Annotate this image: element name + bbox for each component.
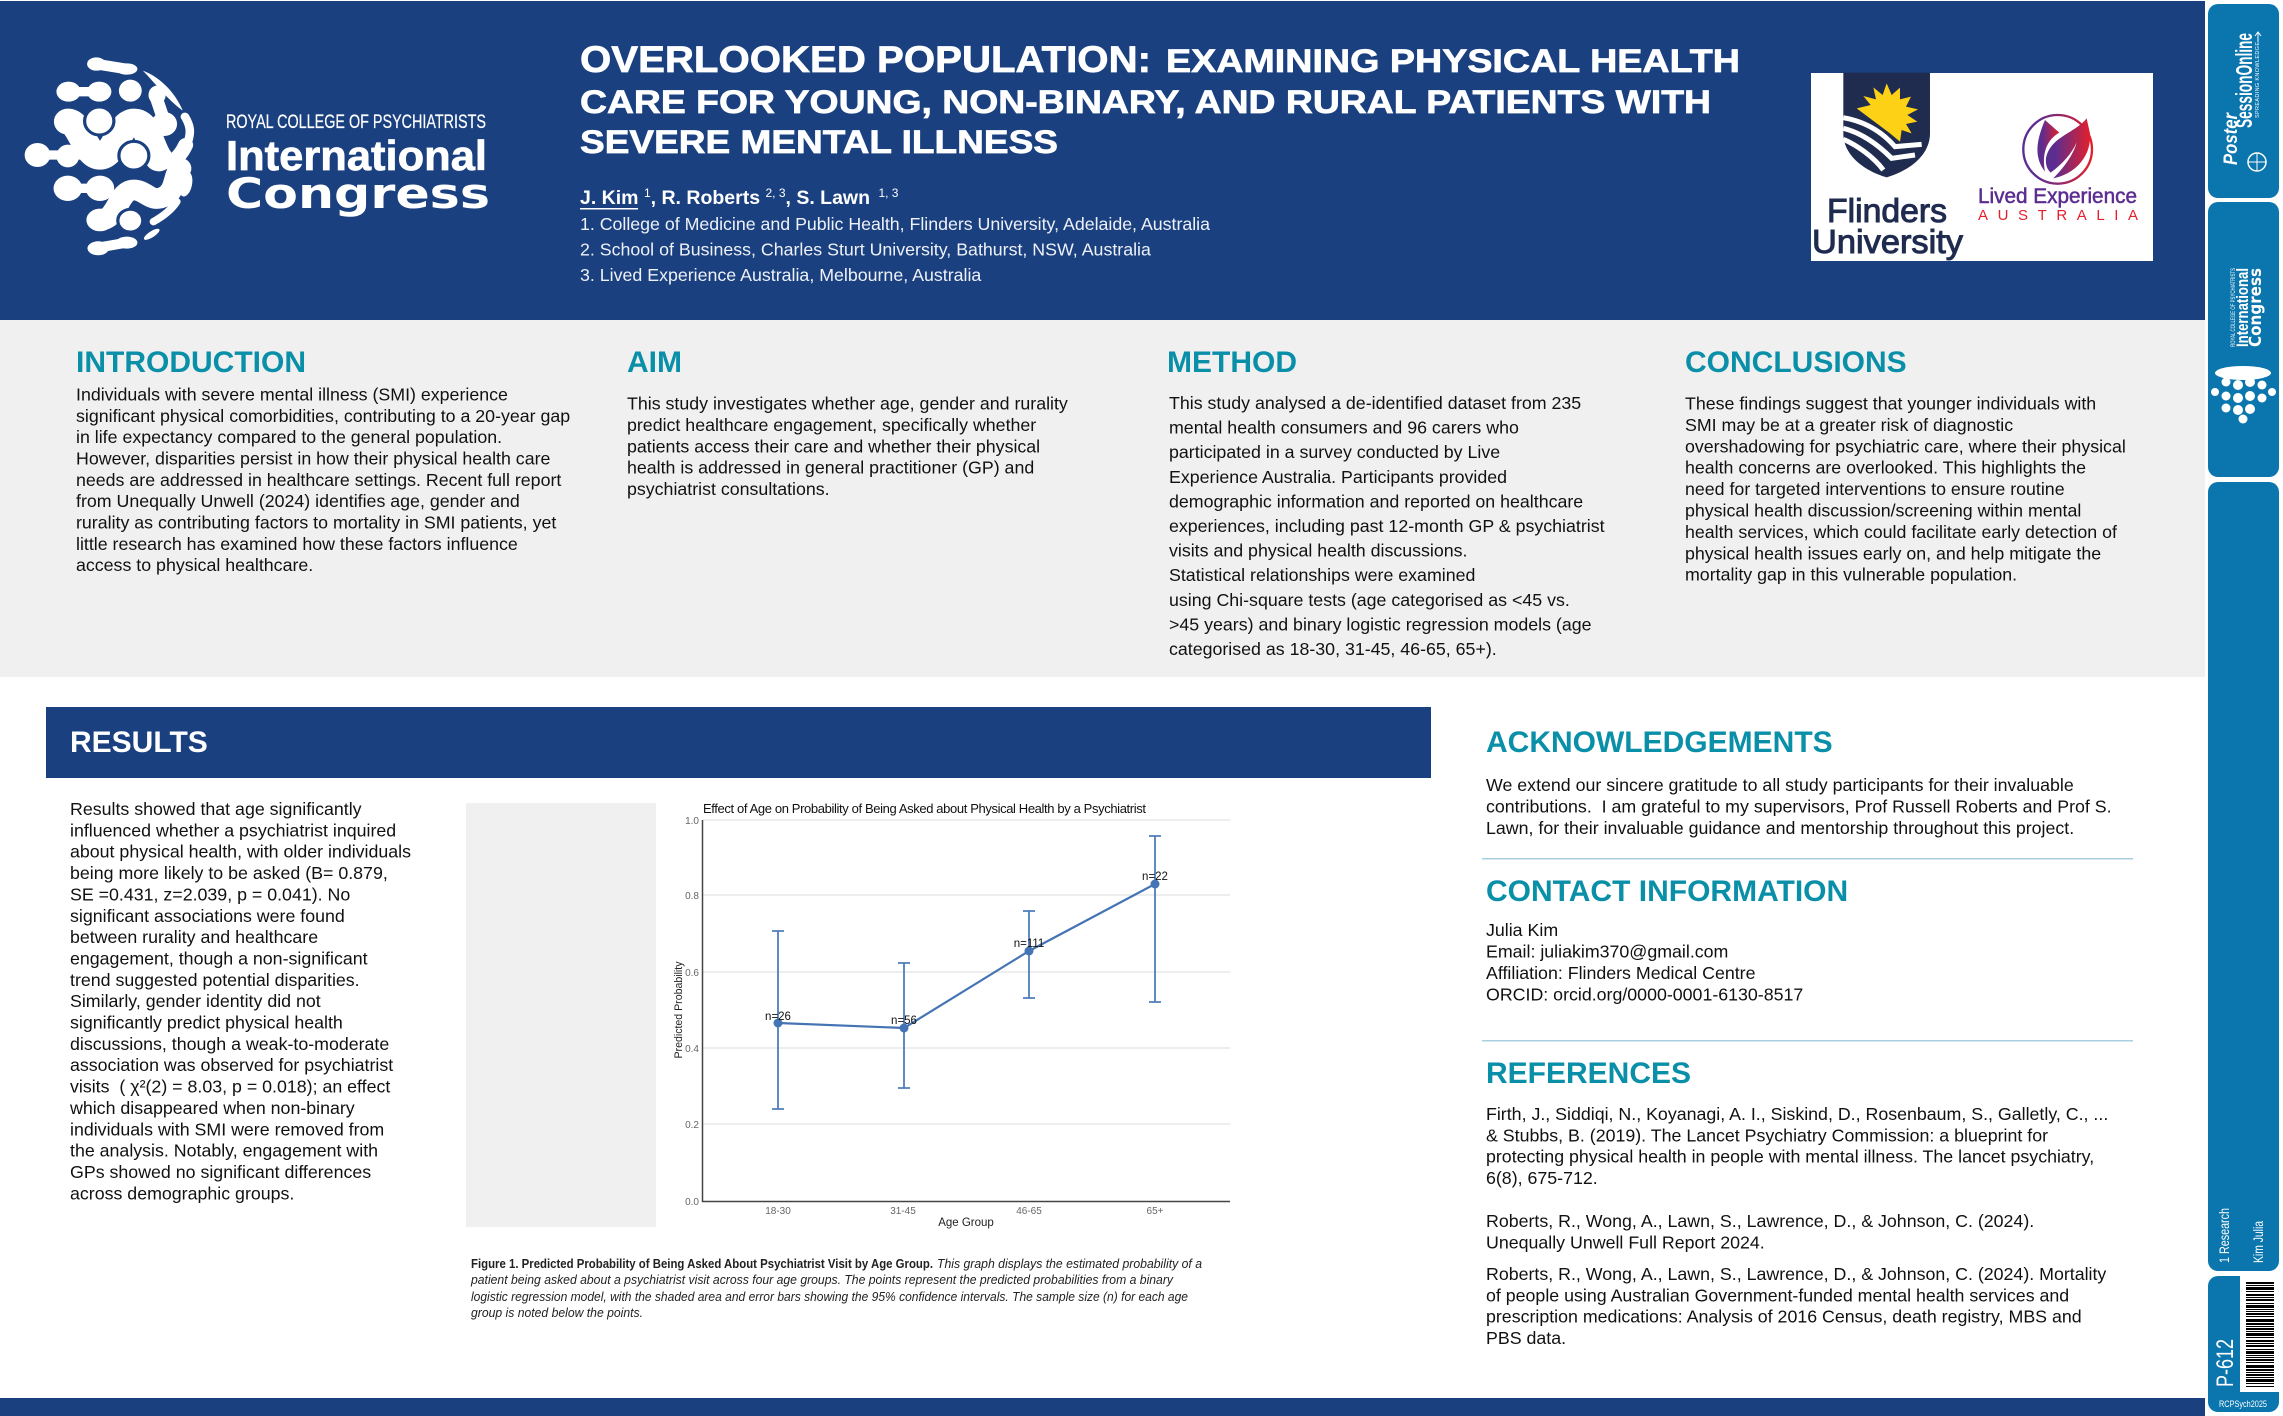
panel: conclusions bbox=[1685, 346, 2126, 585]
panel: conclusions: need for targeted interventions to ensure routine bbox=[1685, 479, 2065, 499]
panel: conclusions: CONCLUSIONS bbox=[1685, 346, 1907, 379]
authors bbox=[580, 186, 899, 210]
panel: acknowledgements: Lawn, for their invaluable guidance and mentorship throughout this project. bbox=[1486, 818, 2074, 838]
icon: congress dome bbox=[2211, 366, 2276, 424]
panel: references bbox=[1486, 1057, 2108, 1348]
trend line and points bbox=[778, 884, 1155, 1028]
panel: method: Statistical relationships were examined bbox=[1169, 565, 1475, 585]
results text: discussions, though a weak-to-moderate bbox=[70, 1034, 389, 1054]
panel: introduction: in life expectancy compared to the general population. bbox=[76, 427, 502, 447]
figure caption: group is noted below the points. bbox=[471, 1305, 643, 1320]
sidebar: International Congress: Congress bbox=[2246, 268, 2266, 347]
affiliations bbox=[580, 214, 1210, 285]
authors: , R. Roberts bbox=[651, 187, 765, 209]
results text: across demographic groups. bbox=[70, 1183, 294, 1203]
panel: aim: patients access their care and whether their physical bbox=[627, 436, 1040, 456]
logo text: International bbox=[226, 132, 487, 179]
results text: Similarly, gender identity did not bbox=[70, 991, 321, 1011]
panel: conclusions: physical health issues early on, and help mitigate the bbox=[1685, 543, 2101, 563]
panel: method: using Chi-square tests (age categorised as <45 vs. bbox=[1169, 590, 1570, 610]
sidebar: poster id and barcode bbox=[2208, 1276, 2279, 1412]
title: CARE FOR YOUNG, NON-BINARY, AND RURAL PATIENTS WITH bbox=[580, 84, 1711, 120]
panel: introduction: significant physical comorbidities, contributing to a 20-year gap bbox=[76, 406, 570, 426]
panel: introduction: INTRODUCTION bbox=[76, 346, 306, 379]
panel: introduction: needs are addressed in healthcare settings. Recent full report bbox=[76, 470, 561, 490]
results text: SE =0.431, z=2.039, p = 0.041). No bbox=[70, 884, 350, 904]
panel: references: of people using Australian Government-funded mental health services and bbox=[1486, 1285, 2069, 1305]
figure caption bbox=[470, 1256, 1202, 1320]
logo: Lived Experience Australia bbox=[1978, 115, 2138, 224]
title bbox=[580, 39, 1740, 160]
panel: method: categorised as 18-30, 31-45, 46-65, 65+). bbox=[1169, 639, 1497, 659]
results text: the analysis. Notably, engagement with bbox=[70, 1141, 378, 1161]
panel: introduction: However, disparities persist in how their physical health care bbox=[76, 448, 550, 468]
results heading bar bbox=[46, 707, 1431, 778]
panel: contact information: Affiliation: Flinders Medical Centre bbox=[1486, 963, 1756, 983]
panel: introduction: Individuals with severe mental illness (SMI) experience bbox=[76, 384, 508, 404]
panel: method: mental health consumers and 96 carers who bbox=[1169, 418, 1519, 438]
logo: Flinders University: University bbox=[1812, 223, 1964, 260]
panel: method: experiences, including past 12-month GP & psychiatrist bbox=[1169, 516, 1605, 536]
results text: trend suggested potential disparities. bbox=[70, 970, 360, 990]
authors: , S. Lawn bbox=[786, 187, 875, 209]
panel: method: METHOD bbox=[1167, 346, 1297, 379]
axis ticks: 0.6 bbox=[685, 968, 699, 979]
icon: globe of linked blobs bbox=[25, 57, 194, 255]
sidebar: research category and author bbox=[2208, 482, 2279, 1271]
axis ticks: 0.2 bbox=[685, 1120, 699, 1131]
results text: significant associations were found bbox=[70, 906, 345, 926]
logo: Royal College of Psychiatrists International Congress bbox=[25, 57, 490, 255]
panel: introduction: rurality as contributing factors to mortality in SMI patients, yet bbox=[76, 512, 556, 532]
figure caption: Figure 1. Predicted Probability of Being Asked About Psychiatrist Visit by Age Group. bbox=[471, 1256, 933, 1271]
panel: references: Unequally Unwell Full Report 2024. bbox=[1486, 1232, 1765, 1252]
panel: introduction: from Unequally Unwell (2024) identifies age, gender and bbox=[76, 491, 520, 511]
panel: contact information: CONTACT INFORMATION bbox=[1486, 875, 1848, 908]
line chart: effect of age on predicted probability bbox=[673, 801, 1230, 1229]
sidebar: research category and author: 1 Research bbox=[2216, 1208, 2232, 1263]
sample size labels: n=56 bbox=[891, 1015, 917, 1027]
axis ticks: 0.8 bbox=[685, 891, 699, 902]
panel: contact information: ORCID: orcid.org/0000-0001-6130-8517 bbox=[1486, 984, 1803, 1004]
logo: Lived Experience Australia: AUSTRALIA bbox=[1978, 207, 2138, 224]
panel: acknowledgements bbox=[1486, 726, 2112, 838]
panel: method: demographic information and reported on healthcare bbox=[1169, 491, 1583, 511]
results text: GPs showed no significant differences bbox=[70, 1162, 371, 1182]
panel: method: >45 years) and binary logistic regression models (age bbox=[1169, 614, 1592, 634]
panel: introduction: little research has examined how these factors influence bbox=[76, 534, 518, 554]
figure caption: logistic regression model, with the shaded area and error bars showing the 95% confidence intervals. The sample size (n) for each age bbox=[471, 1289, 1188, 1304]
results text: about physical health, with older individuals bbox=[70, 842, 411, 862]
panel: references: 6(8), 675-712. bbox=[1486, 1168, 1598, 1188]
panel: method: This study analysed a de-identified dataset from 235 bbox=[1169, 393, 1581, 413]
sidebar: Poster Session Online bbox=[2208, 4, 2279, 198]
panel: method: Experience Australia. Participants provided bbox=[1169, 467, 1507, 487]
authors: 1 bbox=[644, 186, 651, 200]
sidebar: poster id and barcode: P-612 bbox=[2212, 1339, 2239, 1387]
panel: references: PBS data. bbox=[1486, 1328, 1566, 1348]
header band bbox=[0, 1, 2205, 320]
line chart: effect of age on predicted probability: 18-30 bbox=[765, 1206, 791, 1217]
footer band bbox=[0, 1398, 2205, 1416]
panel: references: & Stubbs, B. (2019). The Lancet Psychiatry Commission: a blueprint for bbox=[1486, 1125, 2048, 1145]
panel: method: visits and physical health discussions. bbox=[1169, 541, 1467, 561]
panel: method bbox=[1167, 346, 1605, 659]
panel: introduction bbox=[76, 346, 570, 575]
title: SEVERE MENTAL ILLNESS bbox=[580, 124, 1058, 160]
panel: acknowledgements: We extend our sincere gratitude to all study participants for their invaluable bbox=[1486, 775, 2074, 795]
panel: references: Firth, J., Siddiqi, N., Koyanagi, A. I., Siskind, D., Rosenbaum, S., Galletly, C., ... bbox=[1486, 1104, 2108, 1124]
line chart: effect of age on predicted probability: Predicted Probability bbox=[673, 961, 685, 1058]
panel: conclusions: overshadowing for psychiatric care, where their physical bbox=[1685, 436, 2126, 456]
results text: visits ( χ²(2) = 8.03, p = 0.018); an effect bbox=[70, 1077, 390, 1097]
axis ticks bbox=[685, 816, 699, 1208]
gray chart side panel bbox=[466, 803, 656, 1227]
gray intro band bbox=[0, 320, 2205, 677]
panel: aim: health is addressed in general practitioner (GP) and bbox=[627, 458, 1034, 478]
axis labels: Age Group bbox=[938, 1217, 994, 1229]
panel: conclusions: health services, which could facilitate early detection of bbox=[1685, 522, 2117, 542]
panel: references: REFERENCES bbox=[1486, 1057, 1691, 1090]
line chart: effect of age on predicted probability: 65+ bbox=[1147, 1206, 1164, 1217]
barcode bbox=[2246, 1282, 2274, 1387]
results text: engagement, though a non-significant bbox=[70, 948, 368, 968]
results text: between rurality and healthcare bbox=[70, 927, 318, 947]
authors: 1, 3 bbox=[878, 186, 899, 200]
results text: which disappeared when non-binary bbox=[69, 1098, 355, 1118]
panel: contact information: Julia Kim bbox=[1486, 920, 1558, 940]
panel: references: Roberts, R., Wong, A., Lawn, S., Lawrence, D., & Johnson, C. (2024). Mortality bbox=[1486, 1264, 2106, 1284]
panel: aim: predict healthcare engagement, specifically whether bbox=[627, 415, 1036, 435]
panel: method: participated in a survey conducted by Live bbox=[1169, 442, 1500, 462]
panel: references: prescription medications: Analysis of 2016 Census, death registry, MBS and bbox=[1486, 1307, 2082, 1327]
figure caption: This graph displays the estimated probability of a bbox=[937, 1256, 1202, 1271]
authors: 2, 3 bbox=[765, 186, 786, 200]
sidebar: International Congress: International bbox=[2233, 268, 2252, 347]
line chart: effect of age on predicted probability: 46-65 bbox=[1016, 1206, 1042, 1217]
panel: contact information: Email: juliakim370@gmail.com bbox=[1486, 942, 1728, 962]
title: OVERLOOKED POPULATION: bbox=[580, 39, 1151, 80]
panel: introduction: access to physical healthcare. bbox=[76, 555, 313, 575]
error bars bbox=[772, 836, 1161, 1109]
panel: aim: This study investigates whether age, gender and rurality bbox=[627, 394, 1068, 414]
panel: conclusions: SMI may be at a greater risk of diagnostic bbox=[1685, 415, 2013, 435]
results text: individuals with SMI were removed from bbox=[70, 1119, 384, 1139]
panel: references: protecting physical health in people with mental illness. The lancet psychiatry, bbox=[1486, 1147, 2094, 1167]
axis ticks: 0.0 bbox=[685, 1197, 699, 1208]
sidebar: research category and author: Kim Julia bbox=[2250, 1221, 2266, 1263]
sidebar: International Congress bbox=[2208, 202, 2279, 477]
sample size labels: n=111 bbox=[1014, 938, 1044, 950]
panel: conclusions: mortality gap in this vulnerable population. bbox=[1685, 565, 2017, 585]
affiliations: 1. College of Medicine and Public Health, Flinders University, Adelaide, Australia bbox=[580, 214, 1210, 234]
results heading bar: RESULTS bbox=[70, 726, 208, 759]
sidebar: International Congress: ROYAL COLLEGE OF PSYCHIATRISTS bbox=[2230, 268, 2237, 347]
panel: acknowledgements: ACKNOWLEDGEMENTS bbox=[1486, 726, 1833, 759]
authors: J. Kim bbox=[580, 187, 639, 209]
panel: conclusions: physical health discussion/screening within mental bbox=[1685, 500, 2081, 520]
sidebar: poster id and barcode: RCPSych2025 bbox=[2219, 1399, 2267, 1410]
sample size labels: n=22 bbox=[1142, 871, 1168, 883]
line chart: effect of age on predicted probability: 31-45 bbox=[890, 1206, 916, 1217]
panel: conclusions: These findings suggest that younger individuals with bbox=[1685, 394, 2096, 414]
logo: Flinders University: Flinders bbox=[1827, 192, 1947, 229]
sidebar: Poster Session Online: Poster bbox=[2221, 112, 2242, 165]
results text: being more likely to be asked (B= 0.879, bbox=[70, 863, 388, 883]
chart title: Effect of Age on Probability of Being Asked about Physical Health by a Psychiatrist bbox=[703, 801, 1146, 816]
sample size labels: n=26 bbox=[765, 1011, 791, 1023]
logo: Lived Experience Australia: Lived Experience bbox=[1978, 185, 2137, 208]
logo text: ROYAL COLLEGE OF PSYCHIATRISTS bbox=[226, 112, 486, 133]
affiliations: 3. Lived Experience Australia, Melbourne, Australia bbox=[580, 265, 981, 285]
sample size labels bbox=[765, 871, 1168, 1027]
results text: association was observed for psychiatrist bbox=[70, 1055, 393, 1075]
panel: acknowledgements: contributions. I am grateful to my supervisors, Prof Russell Roberts and Prof S. bbox=[1486, 796, 2112, 816]
axis ticks: 0.4 bbox=[685, 1044, 699, 1055]
panel: aim: AIM bbox=[627, 346, 682, 379]
logo text: Congress bbox=[226, 169, 490, 218]
axis ticks: 1.0 bbox=[685, 816, 699, 827]
logos: Flinders University and Lived Experience Australia bbox=[1811, 73, 2153, 261]
figure caption: patient being asked about a psychiatrist visit across four age groups. The points represent the predicted probabilities from a binary bbox=[470, 1272, 1174, 1287]
results text: Results showed that age significantly bbox=[70, 799, 362, 819]
logo: Flinders University bbox=[1812, 73, 1964, 260]
panel: references: Roberts, R., Wong, A., Lawn, S., Lawrence, D., & Johnson, C. (2024). bbox=[1486, 1211, 2034, 1231]
title: EXAMINING PHYSICAL HEALTH bbox=[1166, 43, 1740, 79]
panel: aim bbox=[627, 346, 1068, 499]
logo text bbox=[226, 112, 490, 218]
results text: influenced whether a psychiatrist inquired bbox=[70, 820, 396, 840]
panel: aim: psychiatrist consultations. bbox=[627, 479, 830, 499]
affiliations: 2. School of Business, Charles Sturt University, Bathurst, NSW, Australia bbox=[580, 240, 1151, 260]
results text bbox=[69, 799, 411, 1203]
panel: conclusions: health concerns are overlooked. This highlights the bbox=[1685, 458, 2086, 478]
sidebar: Poster Session Online: SPREADING KNOWLEDGE bbox=[2255, 42, 2261, 118]
panel: contact information bbox=[1486, 875, 1848, 1004]
results text: significantly predict physical health bbox=[70, 1012, 343, 1032]
